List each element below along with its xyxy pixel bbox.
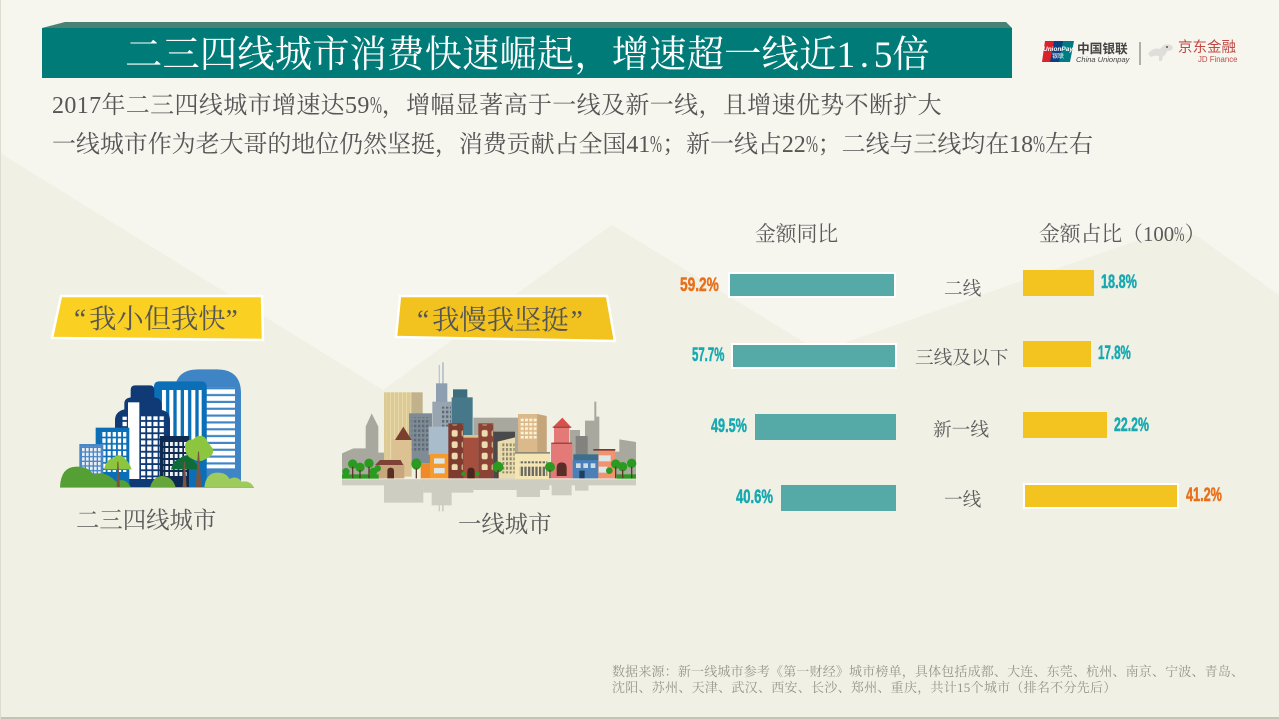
summary line 2: % [650,132,662,158]
callout: small but fast: “我小但我快” [74,304,238,334]
mid blue tower [154,381,207,487]
bar: tier 1 share [1023,483,1179,509]
cream hall [515,452,550,479]
source line 1: 数据来源：新一线城市参考《第一财经》城市榜单，具体包括成都、大连、东莞、杭州、南京、宁波、青岛、 [612,664,1244,679]
dark block [160,436,189,487]
bar: tier 3 share [1023,341,1091,367]
summary line 1: % [370,93,382,119]
chart: year-on-year amount [680,223,897,511]
title: 二三四线城市消费快速崛起，增速超一线近 倍 [125,35,930,76]
bushes [60,467,254,487]
logos [1042,39,1238,65]
icon: JD dog [1148,44,1173,61]
panel: lower-tier cities [50,294,264,534]
panel: first-tier cities [394,294,616,538]
title: 5 [874,35,892,76]
chart: amount share [1023,223,1222,509]
summary line 2: % [806,132,818,158]
brick block [448,423,493,478]
small light block [79,444,103,487]
ground and trees [342,458,636,479]
summary text [52,92,1093,158]
value: 40.6%: 40.6% [736,487,773,508]
label: new tier 1: 新一线 [933,420,989,441]
UnionPay Chinese name: 中国银联 [1077,42,1128,56]
grey silhouettes [342,402,636,478]
summary line 1: 2017年二三四线城市增速达59 ，增幅显著高于一线及新一线，且增速优势不断扩大 [52,93,942,119]
back light-blue tower [174,369,241,487]
bar: new tier 1 share [1023,412,1107,438]
pink tower [551,418,572,478]
value: 18.8%: 18.8% [1101,272,1137,293]
callout: slow but firm [394,294,616,342]
value: 57.7%: 57.7% [692,345,724,366]
value: 41.2%: 41.2% [1186,485,1222,506]
grey towers and spires [409,362,473,463]
dark and cream blocks [493,432,515,478]
JD Finance Chinese name: 京东金融 [1178,40,1236,56]
value: 22.2%: 22.2% [1114,415,1149,436]
icon: UnionPay flag: UnionPay [1043,46,1073,53]
value: 59.2%: 59.2% [680,275,719,296]
label: lower-tier cities: 二三四线城市 [76,508,216,534]
callout: small but fast [50,294,264,342]
icon: UnionPay flag [1042,41,1074,62]
source line 2: 沈阳、苏州、天津、武汉、西安、长沙、郑州、重庆，共计15个城市（排名不分先后） [612,680,1117,695]
orange houses [421,454,449,478]
low house [375,460,404,478]
label: tier 3 and below: 三线及以下 [915,348,1008,369]
summary line 2: 一线城市作为老大哥的地位仍然坚挺，消费贡献占全国41 ；新一线占22 ；二线与三线均在18 左右 [52,132,1093,158]
title: 1 [836,35,855,76]
callout: slow but firm: “我慢我坚挺” [417,305,583,335]
data source note [612,664,1244,695]
chart heading: year-on-year: 金额同比 [755,223,838,246]
reflection [342,479,636,511]
city tier labels [915,278,1008,511]
navy stepped tower [115,385,170,487]
blue block [96,428,129,487]
title: . [860,35,869,76]
UnionPay English name: China Unionpay [1076,55,1129,64]
bar: new tier 1 yoy [755,414,896,440]
trees [104,436,213,487]
label: tier 2: 二线 [944,279,981,300]
salmon house [593,449,615,478]
icon: UnionPay flag: 银联 [1052,51,1064,60]
JD Finance English name: JD Finance [1198,55,1237,64]
bar: tier 2 yoy [728,272,896,298]
tan tower [384,392,423,462]
tan gabled house [392,427,412,477]
label: tier 1: 一线 [944,490,981,511]
chart heading: share: % [1174,223,1185,246]
chart heading: share: 金额占比（100 ） [1039,223,1205,246]
bar: tier 2 share [1023,270,1094,296]
grey and blue buildings [573,436,599,478]
value: 49.5%: 49.5% [711,416,747,437]
logo divider [1139,42,1141,65]
bar: tier 1 yoy [781,485,896,511]
label: first-tier cities: 一线城市 [458,512,552,538]
title banner [42,22,1012,78]
bar: tier 3 yoy [731,343,897,369]
tan office [518,414,547,453]
value: 17.8%: 17.8% [1098,343,1131,364]
summary line 2: % [1033,132,1045,158]
